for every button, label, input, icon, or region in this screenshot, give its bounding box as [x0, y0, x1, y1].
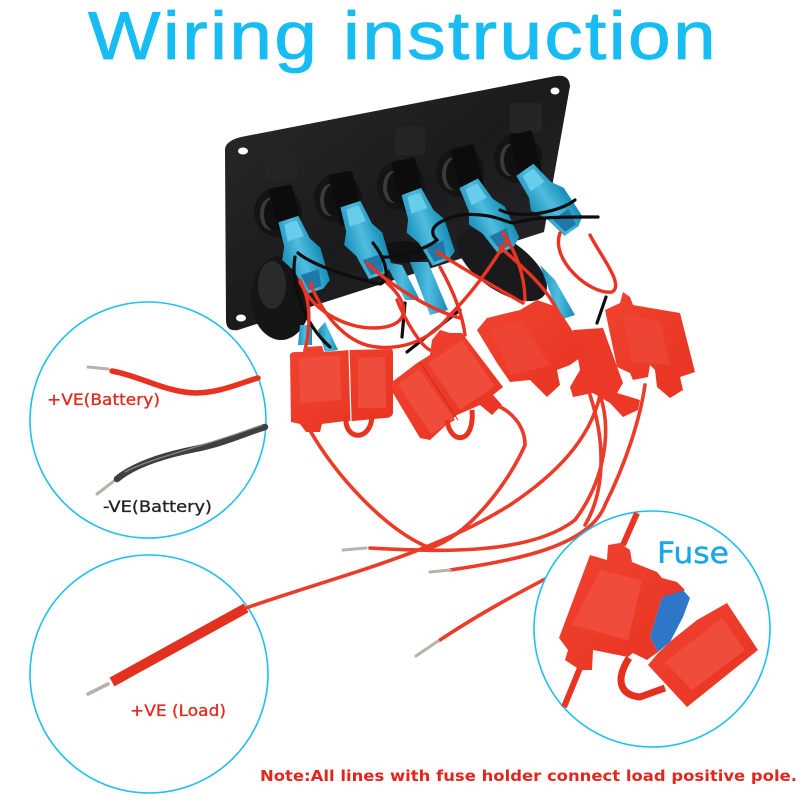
- note: Note:All lines with fuse holder connect load positive pole.: [260, 767, 797, 785]
- negative battery wire: [97, 425, 265, 494]
- fuse holder: 5: [605, 292, 695, 398]
- fuse holder lid: [648, 603, 758, 707]
- red jumper wires: [300, 233, 616, 350]
- title: Wiring instruction: [88, 0, 718, 74]
- switch: 1: [254, 184, 333, 298]
- positive battery wire: [88, 367, 258, 393]
- rear sockets: [251, 215, 559, 340]
- label: negative battery: -VE(Battery): [103, 497, 212, 516]
- fuse holder body: [559, 543, 685, 670]
- long load wires: [246, 385, 645, 640]
- lower terminals: [298, 262, 575, 352]
- switch: 5: [494, 130, 587, 244]
- fuse label: Fuse: [657, 536, 729, 570]
- callout circle: load wire: [30, 555, 268, 793]
- callout circle: fuse: [534, 511, 770, 747]
- bare wire tips: [343, 548, 450, 656]
- fuse output wire: [564, 668, 580, 707]
- load wire tip: [88, 684, 108, 694]
- fuse holder: 4: [570, 328, 640, 417]
- mounting holes: [236, 88, 560, 322]
- fuse holder: 3: [477, 300, 587, 397]
- fuse holder: 2: [392, 330, 503, 440]
- metal plate: [225, 76, 570, 330]
- switch: 4: [436, 144, 523, 260]
- fuse holder: 1: [290, 346, 393, 435]
- recessed pads: [265, 103, 542, 180]
- fuse blade: [650, 590, 690, 652]
- switch panel: [225, 76, 616, 352]
- label: positive battery: +VE(Battery): [47, 390, 160, 409]
- black jumper wires: [294, 200, 606, 352]
- label: load: +VE (Load): [130, 701, 226, 720]
- fuse input wire: [623, 513, 637, 545]
- callout circle: battery wires: [30, 302, 266, 538]
- load wire thick section: [112, 608, 246, 682]
- fuse holder strap: [621, 658, 665, 697]
- switch: 2: [314, 170, 395, 283]
- switch: 3: [377, 157, 458, 270]
